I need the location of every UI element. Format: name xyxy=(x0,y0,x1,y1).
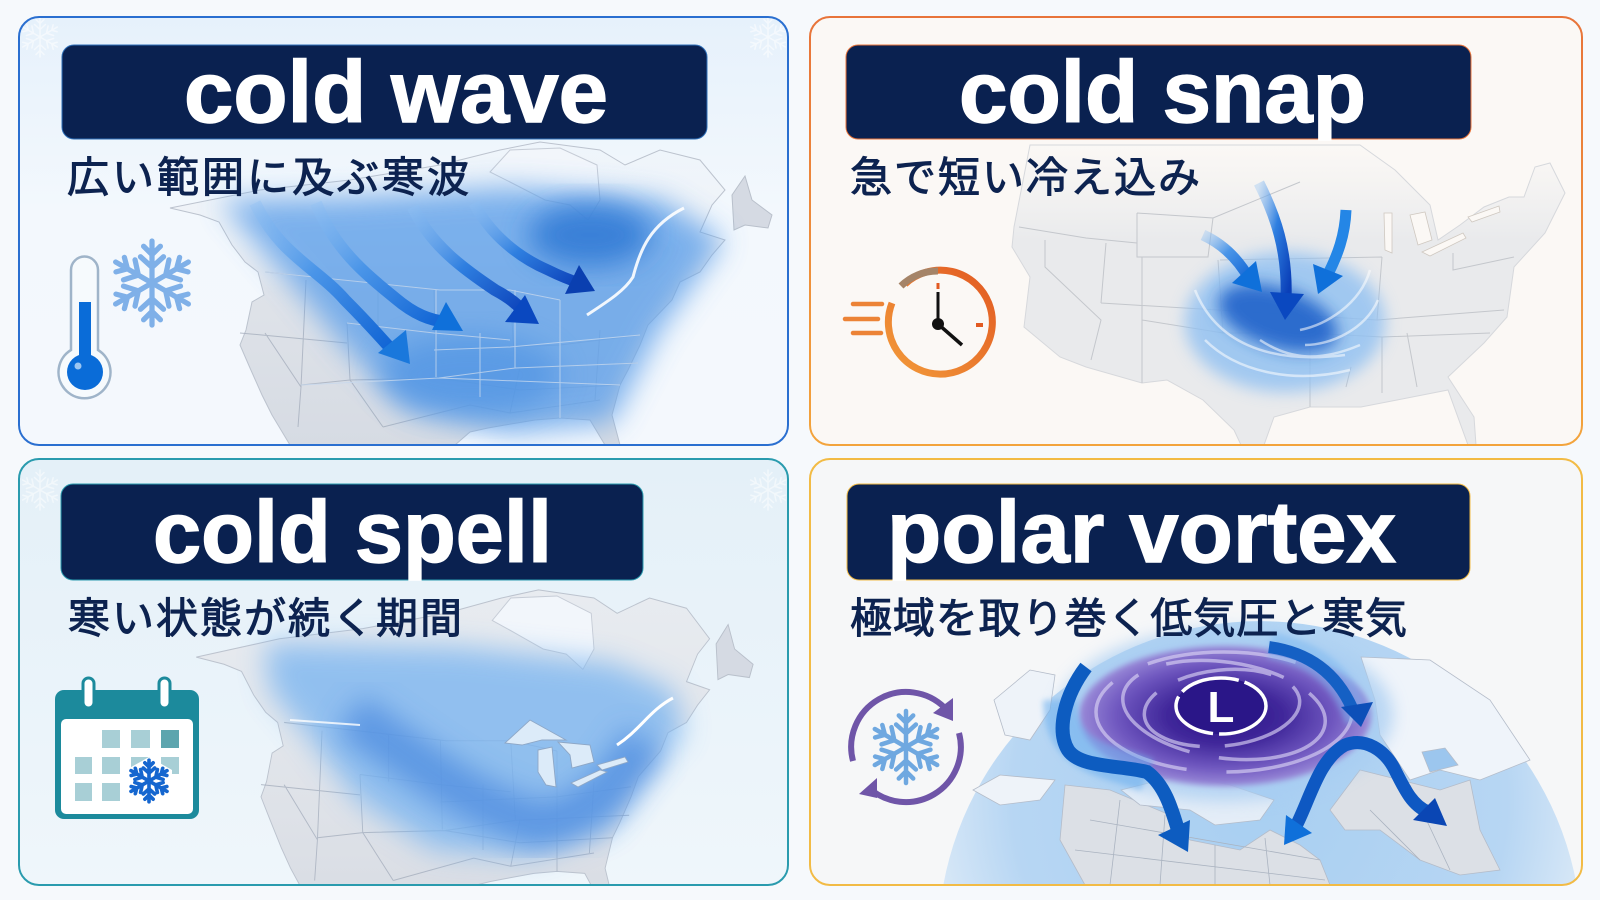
arrow: converging cold air 2 xyxy=(1259,183,1304,320)
subtitle: cold snap: 急で短い冷え込み xyxy=(850,154,1200,201)
vortex swirl lines xyxy=(1096,648,1352,772)
arrow: cold air 4 xyxy=(474,203,595,294)
speed lines xyxy=(845,304,882,333)
marker: low pressure L xyxy=(1176,678,1266,734)
subtitle: polar vortex: 極域を取り巻く低気圧と寒気 xyxy=(850,595,1407,642)
icon: rotating snowflake xyxy=(851,692,961,802)
map: North America with lingering cold band xyxy=(196,590,753,899)
panel border xyxy=(19,17,788,445)
icon: stopwatch clock xyxy=(845,270,992,374)
arrow: converging cold air 1 xyxy=(1203,235,1262,292)
panel border xyxy=(19,459,788,885)
panel: cold wave xyxy=(19,17,788,445)
globe with polar vortex xyxy=(943,621,1577,885)
arrow: cold air 2 xyxy=(316,203,463,331)
title bar: cold wave: cold wave xyxy=(184,44,608,141)
marker: low pressure L: L xyxy=(1208,683,1234,732)
title bar: cold snap: cold snap xyxy=(959,44,1366,141)
background frost flakes xyxy=(20,17,788,57)
arrow: jet stream left xyxy=(1063,667,1190,852)
panel: cold spell xyxy=(19,459,788,899)
title bar: cold wave xyxy=(62,44,707,141)
title bar: cold snap xyxy=(846,44,1471,141)
icon: calendar with snowflake xyxy=(55,678,199,819)
panel: polar vortex xyxy=(810,459,1582,885)
panel: cold snap xyxy=(810,17,1582,445)
map: North America with wide cold air mass xyxy=(170,142,772,445)
title bar: polar vortex: polar vortex xyxy=(887,484,1396,581)
arrow: jet stream upper right xyxy=(1269,647,1373,727)
arrow: cold air 1 xyxy=(255,203,410,364)
background frost flakes xyxy=(20,470,788,510)
panel border xyxy=(810,17,1582,445)
title bar: cold spell xyxy=(61,484,643,581)
calendar snowflake xyxy=(128,760,170,802)
map: United States with sudden cold core xyxy=(1012,145,1565,445)
land masses xyxy=(973,657,1530,885)
lakes xyxy=(1384,206,1500,256)
subtitle: cold spell: 寒い状態が続く期間 xyxy=(68,595,462,642)
arrow: cold air 3 xyxy=(413,207,539,324)
arrow: converging cold air 3 xyxy=(1313,210,1346,294)
vortex icon snowflake xyxy=(870,711,942,783)
subtitle: cold wave: 広い範囲に及ぶ寒波 xyxy=(67,154,469,201)
panel border xyxy=(810,459,1582,885)
arrow: jet stream lower right wave xyxy=(1284,743,1447,845)
icon: thermometer xyxy=(59,256,110,398)
great lakes xyxy=(505,720,566,745)
icon: snowflake xyxy=(110,241,194,325)
title bar: cold spell: cold spell xyxy=(153,484,552,581)
